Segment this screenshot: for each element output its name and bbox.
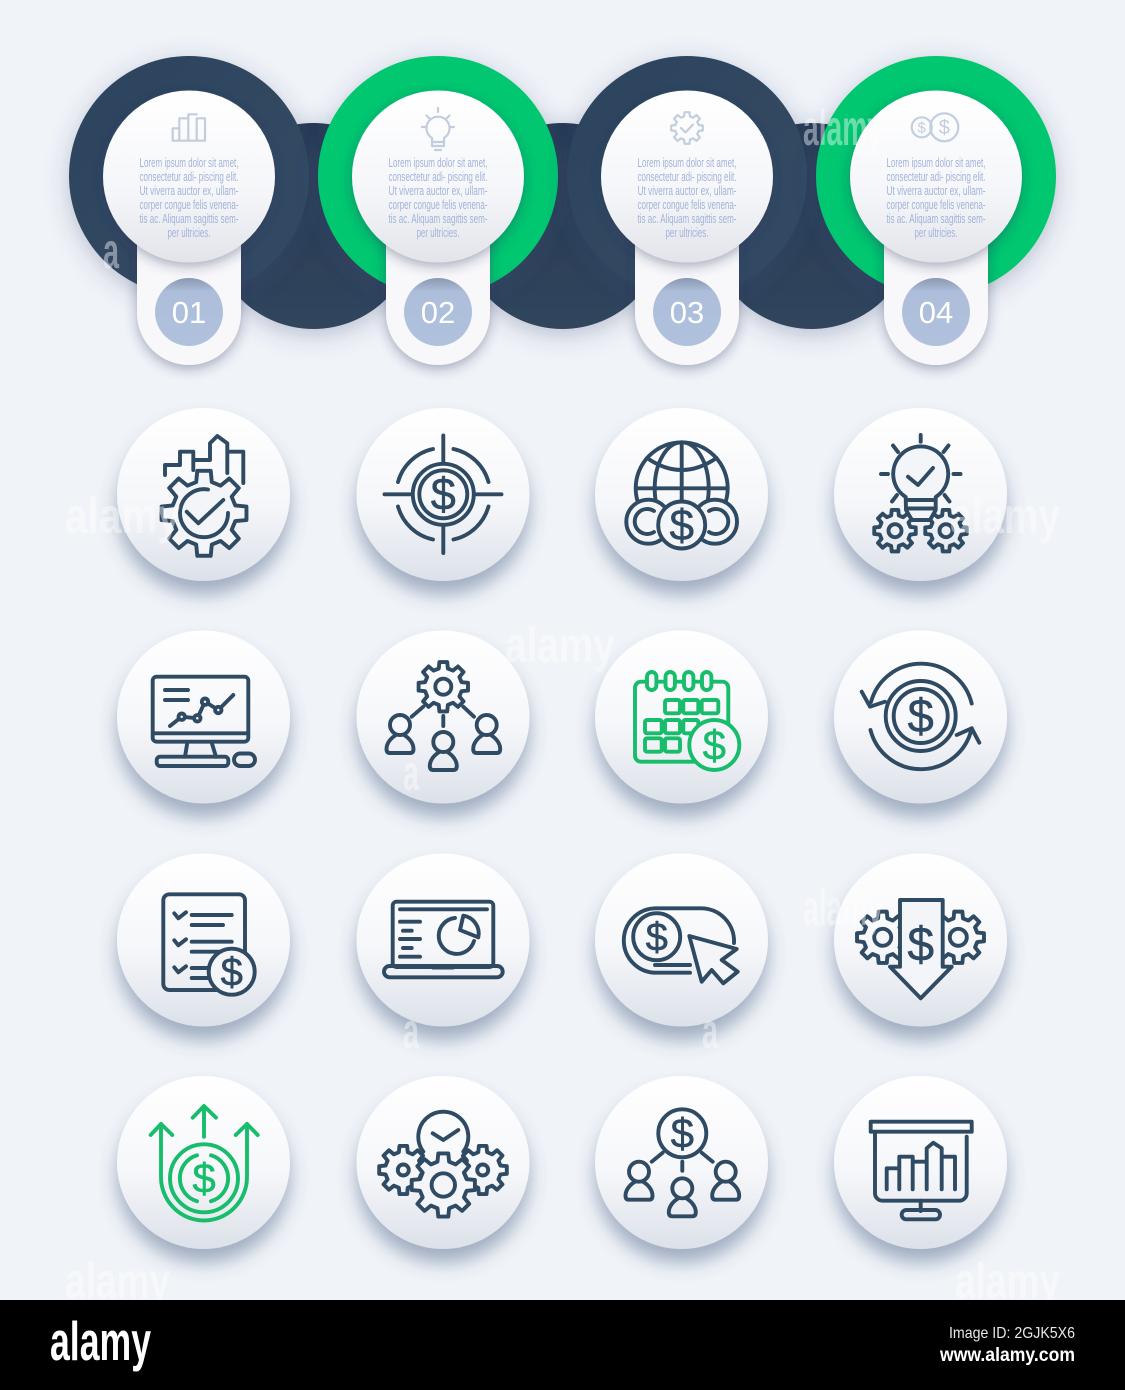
icon: bar chart bbox=[173, 114, 205, 141]
footer logo: alamy bbox=[50, 1310, 151, 1372]
step 3 text: consectetur adi- piscing elit. bbox=[638, 170, 736, 184]
icon: growth arrows with coin (green): $ bbox=[192, 1155, 216, 1202]
icon: globe with coins bbox=[626, 442, 737, 550]
ring: step 4 bbox=[816, 56, 1056, 296]
watermarks: a bbox=[403, 745, 420, 801]
icon: cost reduction arrow with gears: $ bbox=[907, 918, 934, 971]
step 3 text: corper congue felis venena- bbox=[638, 198, 736, 212]
watermarks: a bbox=[103, 223, 120, 279]
step 3 text bbox=[638, 156, 736, 240]
watermarks: alamy bbox=[803, 880, 883, 936]
icon: dollar and team: $ bbox=[671, 1110, 694, 1157]
icon: light bulb with gears bbox=[874, 435, 967, 551]
icon: laptop with pie chart bbox=[384, 902, 503, 977]
icon: dollar button with cursor bbox=[624, 908, 738, 983]
step 1 text bbox=[140, 156, 238, 240]
watermarks: a bbox=[403, 1003, 420, 1059]
image id: Image ID: 2GJK5X6 bbox=[949, 1325, 1075, 1342]
step 3 text: per ultricies. bbox=[666, 226, 708, 240]
watermarks: alamy bbox=[955, 1253, 1060, 1309]
step 3 text: tis ac. Aliquam sagittis sem- bbox=[638, 212, 736, 226]
ring: step 2 bbox=[318, 56, 558, 296]
website: www.alamy.com bbox=[939, 1345, 1075, 1366]
icon: light bulb bbox=[422, 108, 454, 150]
step 2 card bbox=[352, 90, 524, 365]
icon: globe with coins: $ bbox=[669, 501, 694, 550]
step 3 text: Lorem ipsum dolor sit amet, bbox=[638, 156, 736, 170]
step 4 text: tis ac. Aliquam sagittis sem- bbox=[886, 212, 986, 226]
step 2 text: Ut viverra auctor ex, ullam- bbox=[388, 184, 488, 198]
step 3 text: Ut viverra auctor ex, ullam- bbox=[638, 184, 736, 198]
icon: checklist with dollar: $ bbox=[221, 950, 243, 994]
ring: step 3 bbox=[567, 56, 807, 296]
icon: dollar and team bbox=[626, 1109, 739, 1216]
ring: step 1 bbox=[69, 56, 309, 296]
icon: two coins: $ bbox=[939, 117, 950, 139]
watermarks: alamy bbox=[65, 488, 180, 544]
back circles joining the steps bbox=[210, 123, 914, 329]
step 4 text bbox=[886, 156, 986, 240]
step 2 text bbox=[388, 156, 488, 240]
icon: growth arrows with coin (green) bbox=[151, 1106, 258, 1220]
step 4 text: per ultricies. bbox=[914, 226, 958, 240]
step 4 card bbox=[850, 90, 1022, 365]
watermarks: alamy bbox=[505, 617, 615, 673]
icon: two coins: $ bbox=[918, 120, 927, 136]
step 4 text: Ut viverra auctor ex, ullam- bbox=[886, 184, 986, 198]
watermarks: alamy bbox=[65, 1253, 170, 1309]
icon: two coins bbox=[912, 113, 958, 141]
step 4 text: Lorem ipsum dolor sit amet, bbox=[886, 156, 986, 170]
step 2 text: corper congue felis venena- bbox=[388, 198, 488, 212]
step 2 text: tis ac. Aliquam sagittis sem- bbox=[388, 212, 488, 226]
number badge 01: 01 bbox=[172, 295, 206, 330]
step 1 text: Lorem ipsum dolor sit amet, bbox=[140, 156, 238, 170]
step 2 text: per ultricies. bbox=[416, 226, 460, 240]
step 1 text: corper congue felis venena- bbox=[140, 198, 238, 212]
watermarks bbox=[65, 100, 1060, 1309]
step 1 text: tis ac. Aliquam sagittis sem- bbox=[140, 212, 238, 226]
step 1 card bbox=[103, 90, 275, 365]
step 4 text: corper congue felis venena- bbox=[886, 198, 986, 212]
step 1 text: Ut viverra auctor ex, ullam- bbox=[140, 184, 238, 198]
icon buttons bbox=[117, 408, 1007, 1249]
watermarks: a bbox=[702, 1003, 719, 1059]
icon: dollar target bbox=[384, 436, 502, 553]
icon: calendar with dollar (green) bbox=[635, 672, 739, 770]
watermarks: alamy bbox=[950, 488, 1060, 544]
step 1 text: per ultricies. bbox=[168, 226, 210, 240]
icon: checklist with dollar bbox=[163, 894, 255, 995]
icon: monitor with chart bbox=[153, 677, 255, 766]
number badge 04 bbox=[902, 278, 970, 346]
icon: dollar with circular arrows bbox=[862, 664, 979, 769]
number badge 02: 02 bbox=[421, 295, 455, 330]
icon: dollar target: $ bbox=[431, 469, 456, 520]
icon: gear and team bbox=[386, 662, 500, 770]
number badge 03 bbox=[653, 278, 721, 346]
icon: dollar with circular arrows: $ bbox=[908, 689, 934, 742]
icon: cost reduction arrow with gears bbox=[857, 900, 984, 998]
step 2 text: consectetur adi- piscing elit. bbox=[388, 170, 488, 184]
icon: clock with gears bbox=[379, 1112, 507, 1217]
icon: calendar with dollar (green): $ bbox=[703, 721, 726, 768]
icon: dollar button with cursor: $ bbox=[646, 915, 668, 959]
number badge 04: 04 bbox=[919, 295, 953, 330]
number badge 03: 03 bbox=[670, 295, 704, 330]
number badge 01 bbox=[155, 278, 223, 346]
watermarks: alamy bbox=[803, 100, 883, 156]
step 4 text: consectetur adi- piscing elit. bbox=[886, 170, 986, 184]
step 2 text: Lorem ipsum dolor sit amet, bbox=[388, 156, 488, 170]
step 1 text: consectetur adi- piscing elit. bbox=[140, 170, 238, 184]
step 3 card bbox=[601, 90, 773, 365]
icon: presentation board with chart bbox=[871, 1122, 972, 1219]
icon: gear with check bbox=[671, 112, 703, 144]
number badge 02 bbox=[404, 278, 472, 346]
icon: city and gear with check bbox=[162, 436, 246, 556]
footer band bbox=[0, 1300, 1125, 1390]
